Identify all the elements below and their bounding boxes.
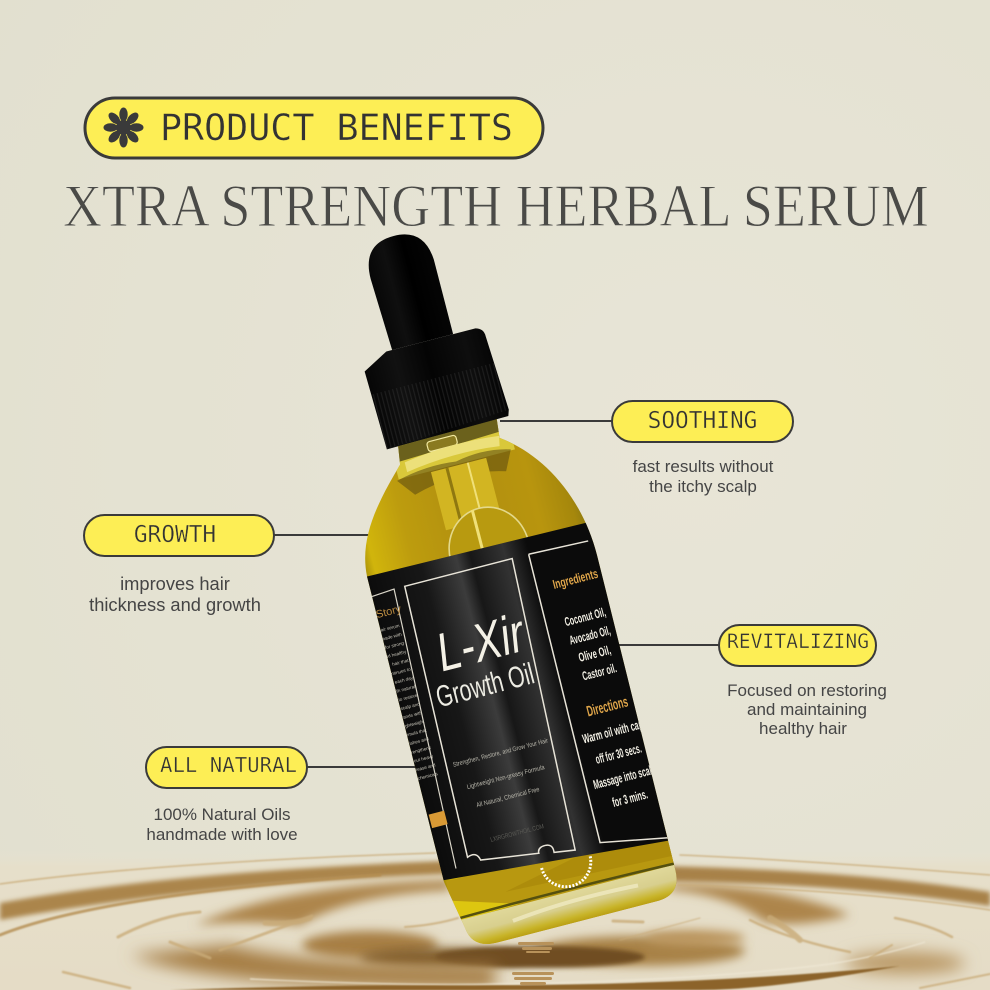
front panel border bbox=[404, 558, 576, 861]
callout: all natural: ALL NATURAL bbox=[160, 753, 297, 777]
product name: L-Xir bbox=[430, 603, 532, 683]
callout: growth: thickness and growth bbox=[89, 594, 261, 615]
callout: all natural: 100% Natural Oils bbox=[153, 805, 291, 824]
tagline: Lightweight Non-greasy Formula bbox=[466, 764, 546, 791]
oil drip reflections bbox=[512, 942, 554, 985]
callout: soothing: the itchy scalp bbox=[649, 477, 757, 496]
thin ripple lines bbox=[0, 853, 990, 988]
black label: with natural bbox=[392, 684, 416, 695]
black label: Massage into scalp bbox=[592, 762, 657, 792]
badge: product benefits bbox=[85, 98, 543, 158]
bottle bbox=[364, 234, 676, 944]
callout: soothing: fast results without bbox=[633, 457, 774, 476]
product type: Growth Oil bbox=[433, 657, 538, 714]
black label: nourishes and bbox=[400, 736, 430, 748]
black label: grow each day bbox=[383, 675, 414, 688]
black label: oils to restore bbox=[390, 693, 418, 704]
callout: revitalizing: REVITALIZING bbox=[727, 630, 869, 653]
callout: revitalizing: healthy hair bbox=[759, 719, 847, 738]
right panel border bbox=[528, 540, 668, 844]
callout: soothing bbox=[612, 401, 793, 496]
black label: Avocado Oil, bbox=[568, 623, 612, 648]
callout: all natural bbox=[146, 747, 307, 844]
tagline: LXIRGROWTHOIL.COM bbox=[490, 823, 545, 844]
icon: flower bbox=[104, 108, 144, 148]
title: XTRA STRENGTH HERBAL SERUM bbox=[63, 173, 929, 240]
ingredients: Ingredients bbox=[551, 566, 599, 592]
tagline: All Natural, Chemical Free bbox=[476, 786, 541, 809]
black label: grease and bbox=[412, 762, 436, 773]
badge: product benefits: PRODUCT BENEFITS bbox=[160, 106, 513, 149]
black label: Our hair serum bbox=[369, 623, 400, 636]
callout: growth: GROWTH bbox=[134, 522, 216, 548]
black label: chemicals bbox=[417, 771, 439, 781]
black label: Warm oil with cap bbox=[581, 716, 645, 746]
black label: off for 30 secs. bbox=[594, 741, 643, 767]
black label bbox=[367, 522, 668, 880]
black label: love for strong bbox=[375, 640, 405, 653]
callout: all natural: handmade with love bbox=[146, 825, 298, 844]
black label: continues to bbox=[386, 666, 412, 678]
liquid ripple surface bbox=[0, 850, 990, 990]
black label: and healthy bbox=[382, 649, 407, 660]
black label: for 3 mins. bbox=[611, 786, 649, 810]
black label: without heavy bbox=[405, 754, 434, 766]
black label: scalp and bbox=[400, 701, 421, 711]
tagline: Strengthen, Restore, and Grow Your Hair bbox=[452, 737, 549, 769]
black label: strengthens bbox=[407, 745, 432, 756]
callout: soothing: SOOTHING bbox=[648, 408, 757, 434]
black label: formula that bbox=[402, 727, 428, 738]
callout: growth bbox=[84, 515, 274, 615]
callout: revitalizing: Focused on restoring bbox=[727, 681, 887, 700]
black label: hair that bbox=[392, 658, 410, 667]
black label: Coconut Oil, bbox=[563, 605, 607, 629]
connector lines bbox=[274, 421, 719, 767]
black label: was made with bbox=[372, 632, 403, 644]
black label: Castor oil. bbox=[581, 661, 618, 683]
black label: strands with bbox=[398, 710, 423, 721]
callout: growth: improves hair bbox=[120, 573, 230, 594]
inner glass details bbox=[396, 419, 677, 944]
glass body bbox=[335, 403, 685, 952]
callout: revitalizing bbox=[719, 625, 887, 738]
black label: Story bbox=[375, 603, 403, 621]
tagline bbox=[453, 738, 548, 842]
left panel bbox=[372, 588, 457, 869]
callout: revitalizing: and maintaining bbox=[747, 700, 867, 719]
label sheen bbox=[403, 539, 601, 873]
dropper bulb bbox=[362, 228, 453, 351]
directions: Directions bbox=[585, 693, 630, 720]
black label: Olive Oil, bbox=[577, 643, 612, 665]
dropper collar bbox=[361, 325, 511, 450]
black label: a lightweight bbox=[399, 719, 425, 730]
